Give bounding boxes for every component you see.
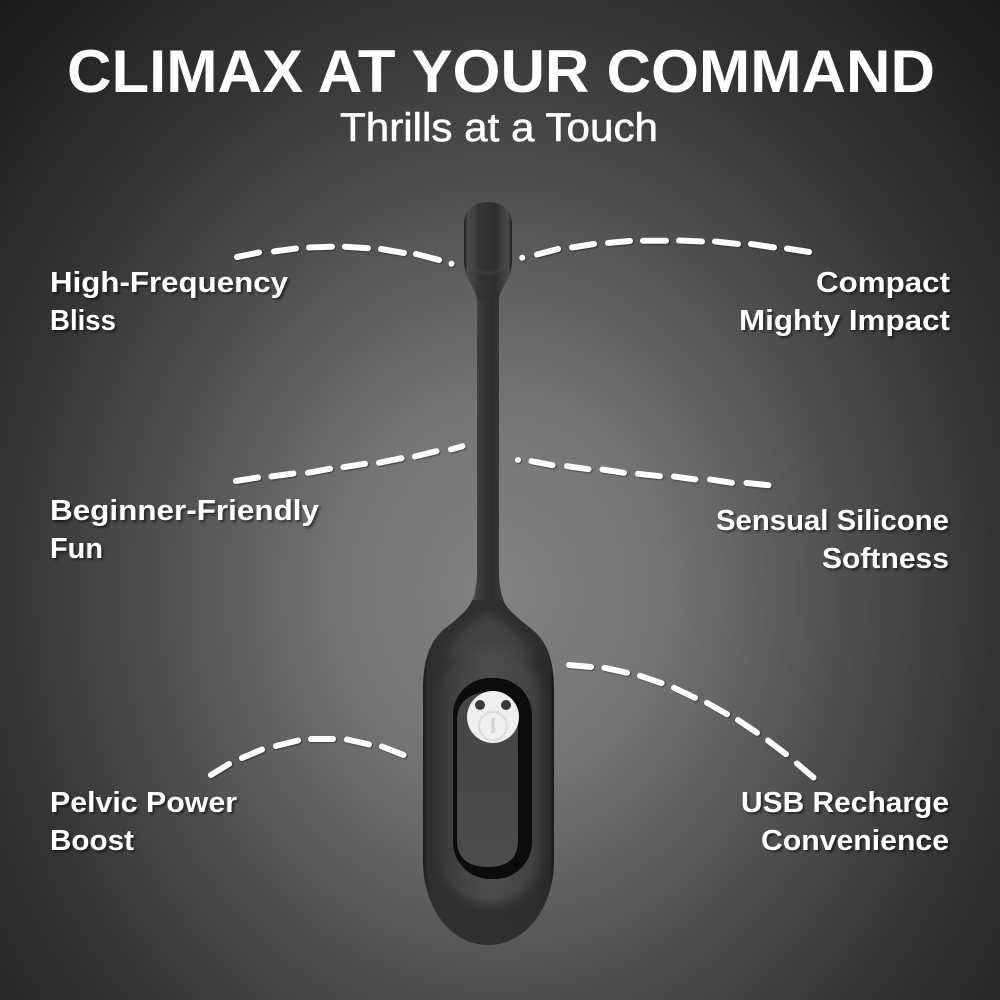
label: high-frequency bliss: High-Frequency [50,267,288,299]
label: high-frequency bliss: Bliss [50,305,116,337]
callout line: pelvic power [211,739,404,775]
label: beginner-friendly fun: Fun [50,533,103,565]
product device [423,202,554,945]
recessed panel [457,692,518,867]
white button [467,691,519,743]
label: USB recharge convenience: Convenience [761,825,949,857]
label: pelvic power boost: Boost [50,825,134,857]
label: sensual silicone softness: Sensual Silicone [716,505,949,537]
subtitle: Thrills at a Touch [340,106,658,150]
callout line: high-frequency [237,247,452,264]
label: pelvic power boost: Pelvic Power [50,787,237,819]
label: beginner-friendly fun: Beginner-Friendly [50,495,319,527]
device body [423,600,554,945]
label: compact mighty impact: Mighty Impact [739,305,950,337]
label: compact mighty impact: Compact [816,267,950,299]
body raised band [440,648,540,904]
callout line: USB recharge [569,665,814,778]
label: USB recharge convenience: USB Recharge [741,787,949,819]
body shoulder highlight [446,612,534,660]
label: sensual silicone softness: Softness [822,543,949,575]
callout line: beginner-friendly [236,446,462,481]
control recess [453,678,532,879]
callout line: silicone [518,460,768,485]
device tip [464,202,512,300]
tip inner contour [473,266,503,274]
title: CLIMAX AT YOUR COMMAND [67,38,935,105]
device stem [466,285,510,614]
callout line: compact [522,240,809,258]
